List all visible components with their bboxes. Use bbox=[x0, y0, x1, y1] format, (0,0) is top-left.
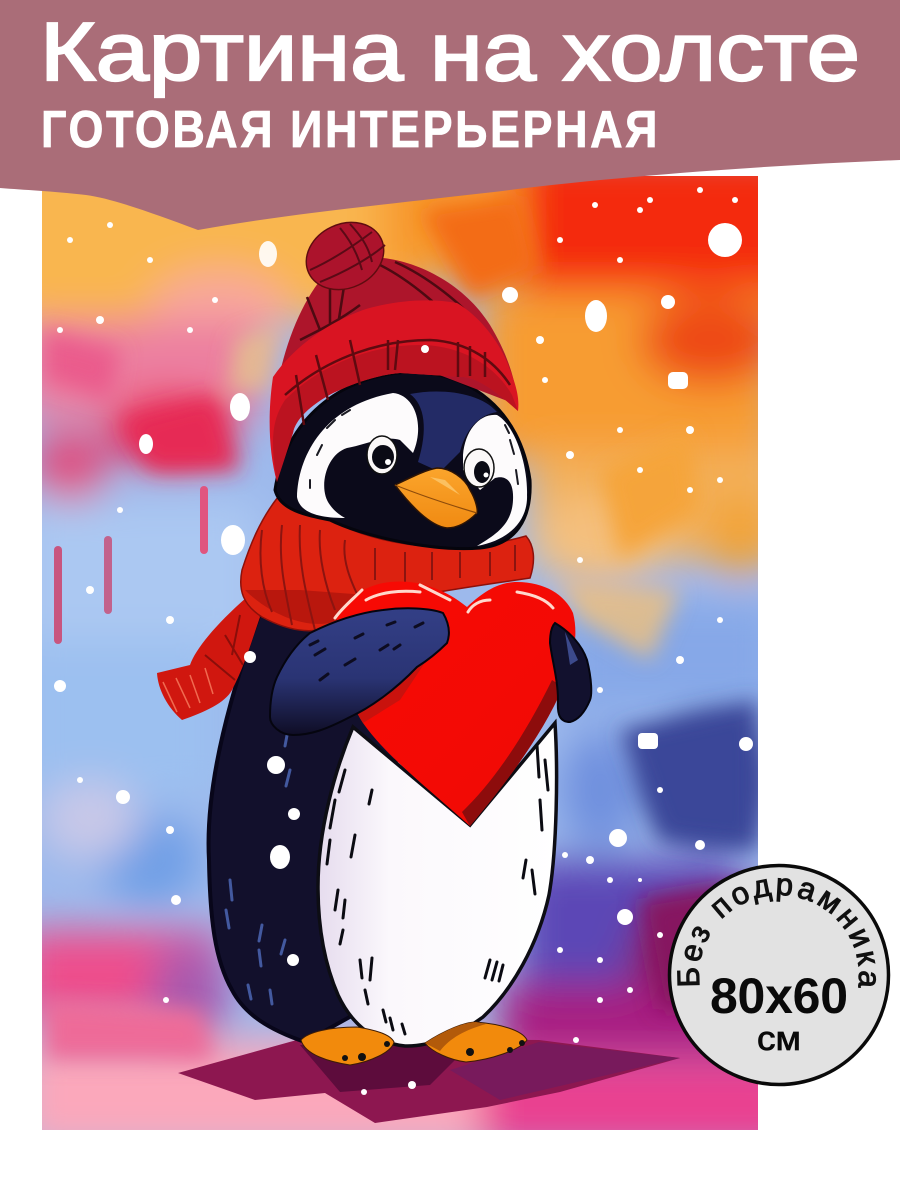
head bbox=[275, 372, 530, 549]
painted background bbox=[42, 176, 758, 1130]
right flipper bbox=[550, 623, 591, 722]
paint drips bbox=[58, 490, 204, 640]
left eye bbox=[367, 436, 397, 474]
hat cuff bbox=[270, 300, 518, 482]
scarf tail bbox=[157, 597, 260, 720]
badge unit: см bbox=[757, 1020, 801, 1058]
penguin white belly bbox=[318, 723, 557, 1046]
right white cheek bbox=[463, 415, 527, 546]
left flipper bbox=[270, 608, 449, 735]
badge size: 80х60 bbox=[710, 968, 848, 1024]
snow bbox=[54, 187, 753, 1095]
ground shadow bbox=[178, 1038, 680, 1123]
pompom bbox=[306, 222, 386, 290]
hat crown bbox=[275, 258, 518, 405]
painting: penguin canvas bbox=[42, 176, 758, 1130]
badge arc text: Без подрамника bbox=[677, 878, 876, 988]
feet bbox=[301, 1022, 527, 1065]
forehead navy bbox=[410, 391, 497, 472]
scarf bbox=[241, 497, 533, 631]
beak bbox=[395, 468, 477, 528]
size badge bbox=[668, 864, 890, 1086]
hat bbox=[270, 258, 518, 482]
header banner bbox=[0, 0, 900, 230]
heart bbox=[335, 581, 575, 826]
left white cheek bbox=[297, 393, 418, 518]
penguin body back bbox=[209, 613, 400, 1042]
right eye bbox=[464, 449, 494, 487]
subtitle: ГОТОВАЯ ИНТЕРЬЕРНАЯ bbox=[41, 101, 660, 159]
title: Картина на холсте bbox=[40, 5, 860, 98]
brush strokes bbox=[45, 195, 758, 1060]
